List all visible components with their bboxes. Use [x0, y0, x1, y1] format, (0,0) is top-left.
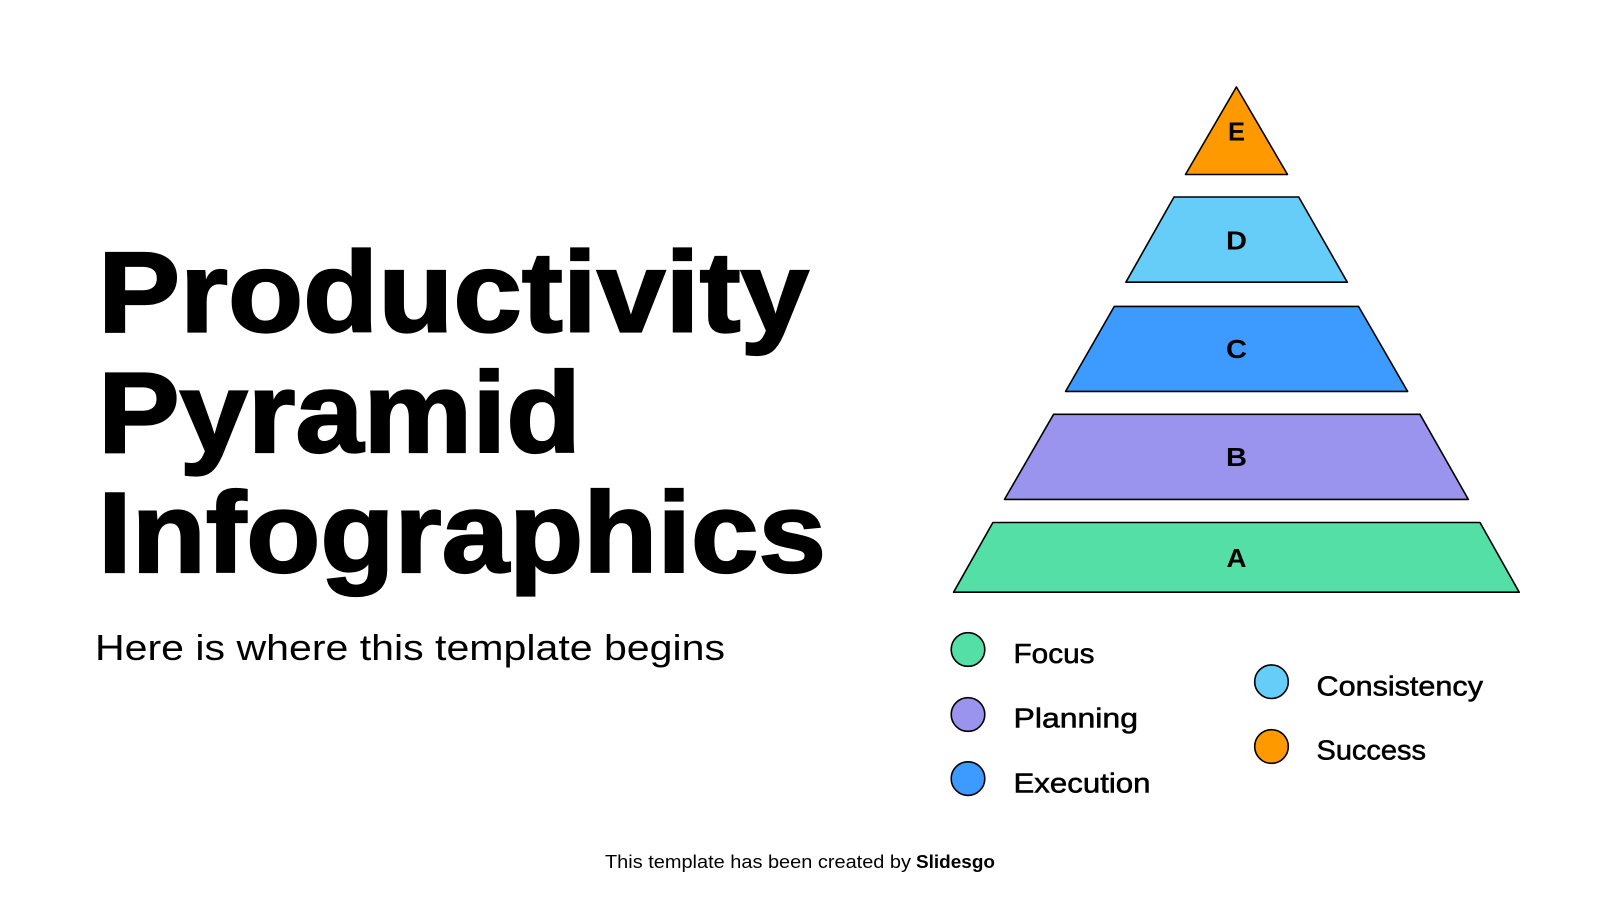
- legend item: Success: [1255, 730, 1426, 766]
- legend item: Consistency: [1255, 665, 1483, 702]
- pyramid chart: [954, 87, 1519, 592]
- legend item: Focus: [951, 633, 1094, 669]
- title: Pyramid: [98, 350, 581, 477]
- legend item: Focus: Focus: [1014, 638, 1094, 669]
- tier B: B: [1226, 444, 1247, 472]
- tier B: [1004, 414, 1468, 499]
- footer credit: This template has been created by: [605, 851, 912, 872]
- title: Infographics: [98, 470, 826, 597]
- legend: [951, 633, 1483, 798]
- legend item: Execution: [951, 762, 1150, 798]
- tier D: [1126, 197, 1347, 282]
- title: [98, 230, 826, 597]
- tier D: D: [1226, 228, 1247, 256]
- tier C: C: [1226, 336, 1247, 364]
- legend item: Planning: [951, 698, 1138, 734]
- legend item: Consistency: Consistency: [1316, 670, 1483, 702]
- tier E: E: [1228, 118, 1245, 146]
- legend item: Execution: Execution: [1014, 768, 1150, 798]
- subtitle: Here is where this template begins: [95, 627, 725, 668]
- legend item: Success: Success: [1316, 734, 1426, 766]
- title: Productivity: [98, 230, 809, 356]
- tier A: [954, 522, 1519, 592]
- tier C: [1066, 306, 1408, 391]
- tier A: A: [1226, 545, 1246, 573]
- legend item: Planning: Planning: [1014, 702, 1138, 734]
- tier E: [1186, 87, 1288, 174]
- footer credit: Slidesgo: [916, 851, 995, 872]
